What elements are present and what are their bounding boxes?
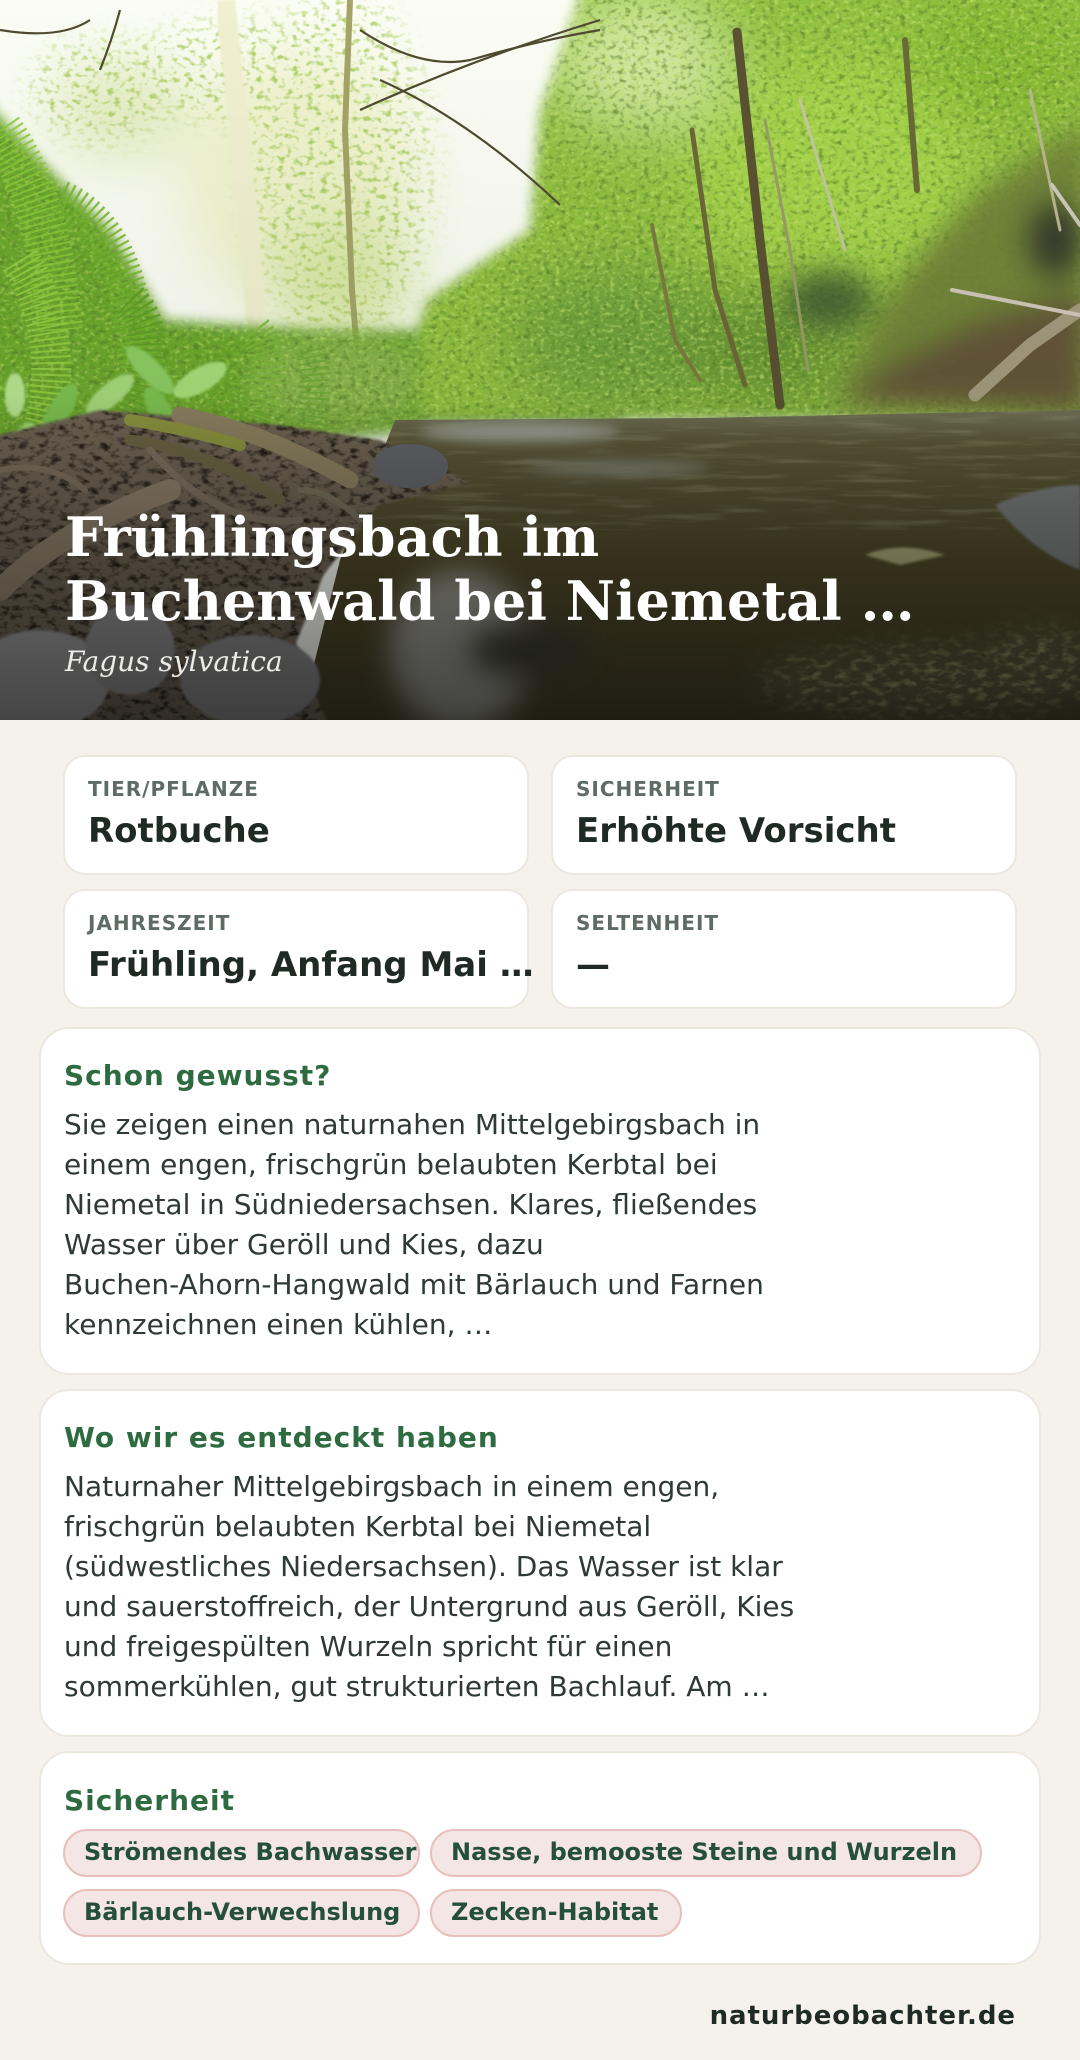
panel: Schon gewusst [39,1027,1041,1375]
root bank [0,400,480,730]
panel: Wo wir es entdeckt haben: frischgrün belaubten Kerbtal bei Niemetal [64,1510,651,1543]
stat card: Seltenheit: — [576,945,610,985]
right forest canopy [410,0,1080,420]
left ferns [0,102,426,442]
pale foliage in the sky [10,0,453,338]
stat card: Sicherheit: Erhöhte Vorsicht [576,811,896,851]
hero: forest stream photo [0,0,1080,720]
far forest [380,240,620,420]
wild garlic leaves [0,340,232,483]
stat card: Jahreszeit: Frühling, Anfang Mai … [88,945,534,985]
panel: Schon gewusst: einem engen, frischgrün belaubten Kerbtal bei [64,1148,718,1181]
water [280,405,1080,730]
panel: Wo wir es entdeckt haben: (südwestliches Niedersachsen). Das Wasser ist klar [64,1550,783,1583]
panel: Wo wir es entdeckt haben: sommerkühlen, gut strukturierten Bachlauf. Am … [64,1670,770,1703]
chip: Nasse, bemooste Steine und Wurzeln [430,1829,982,1877]
panel: Wo wir es entdeckt haben [39,1389,1041,1737]
chip: Bärlauch-Verwechslung [63,1889,420,1937]
stat card: Sicherheit [551,755,1017,875]
stat card: Tier/Pflanze [63,755,529,875]
panel: Sicherheit [39,1751,1041,1965]
title [65,505,915,633]
title: Frühlingsbach im [65,505,599,569]
panel: Wo wir es entdeckt haben: Wo wir es entdeckt haben [64,1421,499,1454]
stat card: Jahreszeit: JAHRESZEIT [88,911,230,935]
stat card: Seltenheit [551,889,1017,1009]
panel: Wo wir es entdeckt haben: und sauerstoffreich, der Untergrund aus Geröll, Kies [64,1590,794,1623]
stat card: Tier/Pflanze: TIER/PFLANZE [88,777,259,801]
panel: Schon gewusst: Buchen-Ahorn-Hangwald mit Bärlauch und Farnen [64,1268,764,1301]
river debris and algae stones [470,548,1080,720]
panel: Schon gewusst: kennzeichnen einen kühlen, … [64,1308,492,1341]
chip: Strömendes Bachwasser: Strömendes Bachwasser [84,1838,416,1866]
panel: Sicherheit: Sicherheit [64,1784,235,1817]
panel: Schon gewusst: Wasser über Geröll und Kies, dazu [64,1228,544,1261]
latin name: Fagus sylvatica [65,645,283,678]
stat card: Sicherheit: SICHERHEIT [576,777,720,801]
stat card: Jahreszeit [63,889,529,1009]
panel: Schon gewusst: Niemetal in Südniedersachsen. Klares, fließendes [64,1188,757,1221]
sky [0,0,1080,720]
chip: Bärlauch-Verwechslung: Bärlauch-Verwechslung [84,1898,400,1926]
right rock [995,485,1080,570]
stat card: Seltenheit: SELTENHEIT [576,911,719,935]
chip: Zecken-Habitat: Zecken-Habitat [451,1898,658,1926]
right slope [785,120,1080,415]
branches and pale trunks in sky [0,0,600,410]
chip: Nasse, bemooste Steine und Wurzeln: Nasse, bemooste Steine und Wurzeln [451,1838,957,1866]
stat card: Tier/Pflanze: Rotbuche [88,811,270,851]
chip: Zecken-Habitat [430,1889,682,1937]
title: Buchenwald bei Niemetal … [65,569,915,633]
panel: Schon gewusst: Sie zeigen einen naturnahen Mittelgebirgsbach in [64,1108,760,1141]
panel: Schon gewusst: Schon gewusst? [64,1059,331,1092]
panel: Wo wir es entdeckt haben: und freigespülten Wurzeln spricht für einen [64,1630,672,1663]
chip: Strömendes Bachwasser [63,1829,420,1877]
panel: Wo wir es entdeckt haben: Naturnaher Mittelgebirgsbach in einem engen, [64,1470,719,1503]
footer brand: naturbeobachter.de [710,2001,1016,2031]
dark bottom overlay [0,0,1080,720]
tree trunks [652,32,1080,405]
